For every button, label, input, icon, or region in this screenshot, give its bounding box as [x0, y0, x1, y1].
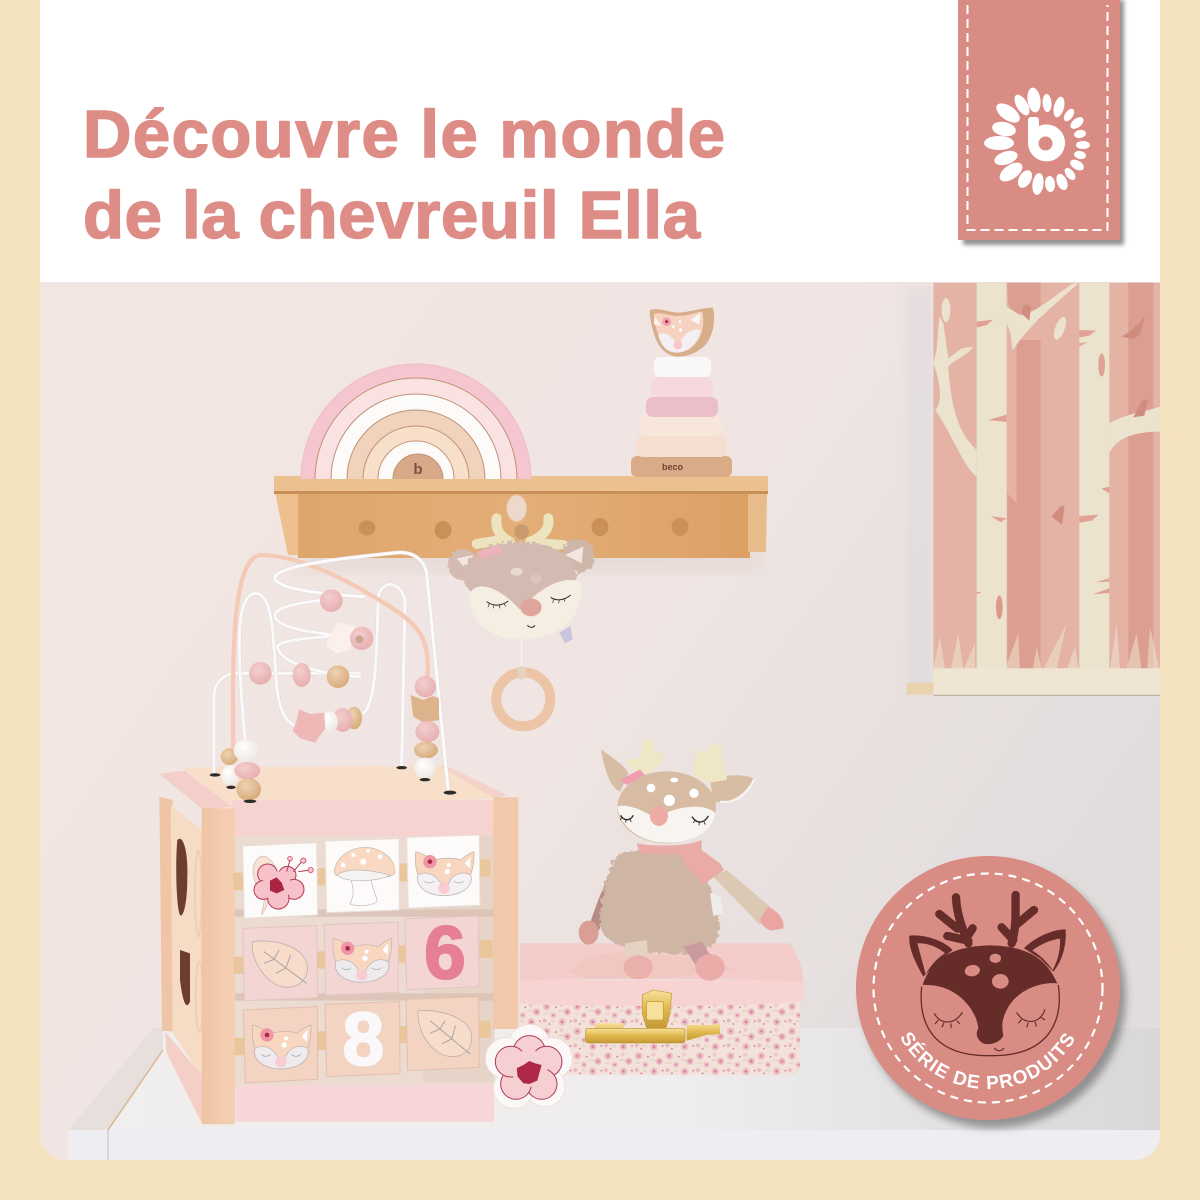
- plush face details: [620, 769, 708, 826]
- plush head: [617, 771, 716, 843]
- wall hanging: [907, 283, 1160, 697]
- cube frame bars: [232, 800, 493, 836]
- stacker fox top: [650, 307, 714, 357]
- title: de la chevreuil Ella: [83, 178, 701, 253]
- plush ears and antlers: [601, 742, 754, 802]
- suitcase handle: [586, 990, 720, 1043]
- tile: leaf 2: [406, 997, 479, 1071]
- badge text: SÉRIE DE PRODUITS: [901, 1032, 1074, 1090]
- suitcase: [520, 943, 803, 1075]
- plush deer music mobile: [448, 495, 595, 726]
- plush deer: [579, 742, 784, 981]
- title: Découvre le monde: [83, 97, 725, 172]
- maze beads: [221, 589, 439, 801]
- cube interior: [232, 835, 495, 1088]
- icon: deer head: [909, 895, 1066, 1056]
- plush arms: [579, 862, 784, 945]
- plush legs: [624, 940, 725, 981]
- wooden rainbow: [300, 364, 532, 479]
- wooden flower toy: [485, 1024, 572, 1108]
- tile: number 6: 6: [424, 911, 466, 995]
- plush body: [601, 850, 719, 954]
- suitcase and plush deer: [520, 742, 803, 1075]
- stacking toy: [631, 307, 732, 477]
- tile: leaf 1: [243, 926, 318, 1001]
- activity cube: [159, 766, 518, 1124]
- logo tab: [958, 0, 1124, 245]
- icon: beco sun logo: [984, 87, 1090, 196]
- cube left side: [159, 797, 173, 1032]
- tile: number 8: [325, 997, 400, 1081]
- cube top: [183, 766, 497, 809]
- white header panel: [40, 0, 1160, 283]
- wooden wall shelf: [274, 476, 768, 570]
- tile: flower: [243, 843, 318, 918]
- wooden rainbow: b: [413, 461, 423, 478]
- tile: number 8: 8: [342, 997, 384, 1081]
- maze base feet: [210, 766, 456, 803]
- photo panel: [40, 282, 1160, 1162]
- tile: fox 1: [407, 835, 480, 908]
- wall: [40, 282, 1160, 1162]
- product series badge: [856, 856, 1130, 1133]
- stacking toy: beco: [662, 462, 684, 472]
- title: [83, 97, 725, 253]
- dowels: [233, 859, 493, 1055]
- plush scarf: [637, 840, 724, 885]
- tile: fox 2: [324, 922, 398, 995]
- plush music mobile and bead maze: [210, 495, 595, 803]
- tile: fox 3: [243, 1007, 318, 1083]
- tile: number 6: [404, 916, 480, 990]
- shelf pegs: [358, 518, 688, 539]
- white shelf: [68, 1028, 1160, 1160]
- bead maze toy: [214, 553, 448, 792]
- tile: mushroom: [325, 839, 399, 913]
